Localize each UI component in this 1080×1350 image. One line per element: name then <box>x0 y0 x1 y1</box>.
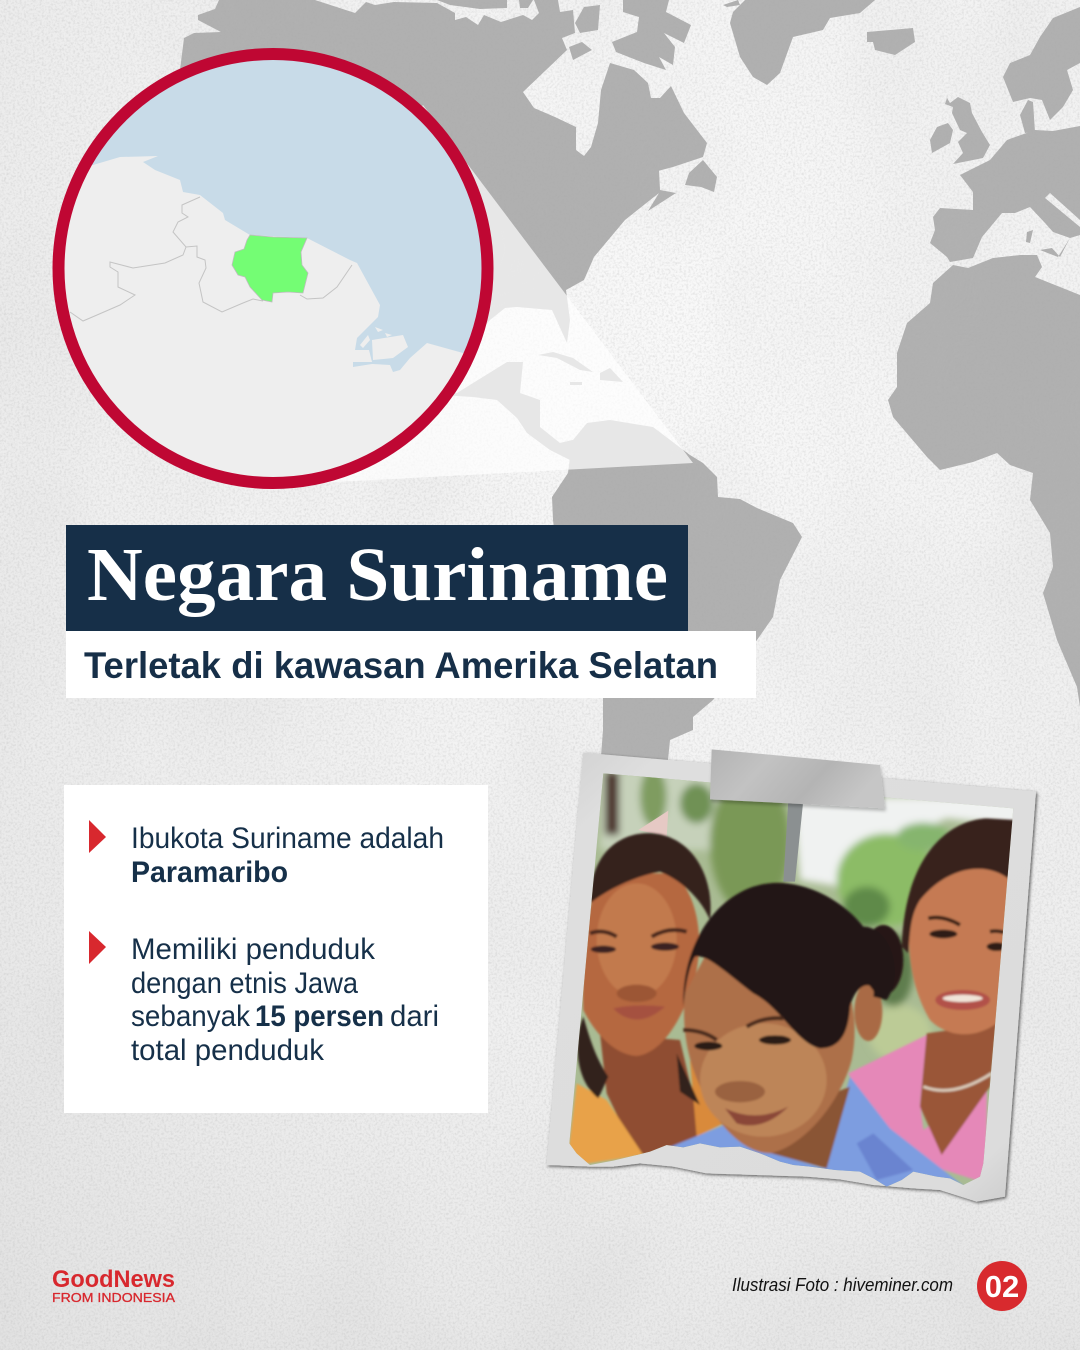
page number <box>977 1261 1027 1311</box>
country borders <box>70 197 352 321</box>
footer logo <box>52 1266 176 1305</box>
subtitle bar: Terletak di kawasan Amerika Selatan <box>84 645 718 686</box>
bullet one <box>89 820 106 853</box>
land in circle <box>64 156 464 477</box>
left girl <box>600 1033 703 1157</box>
South America <box>552 420 802 770</box>
circle ring <box>58 54 488 483</box>
delta islands <box>360 327 408 360</box>
tape <box>710 749 885 808</box>
Iceland <box>867 28 915 55</box>
United Kingdom and Ireland <box>930 97 990 164</box>
fact: population: dari <box>390 1000 439 1033</box>
Central America <box>440 362 573 460</box>
fact: population: Memiliki penduduk <box>131 933 376 966</box>
zoom cone from map to circle <box>273 105 693 483</box>
Newfoundland <box>685 160 717 192</box>
centre girl <box>669 1076 964 1186</box>
sign pole <box>783 800 803 882</box>
photo of three girls <box>569 774 1014 1186</box>
flag <box>638 811 668 837</box>
footer logo: GoodNews <box>52 1266 175 1293</box>
page number: 02 <box>985 1269 1019 1304</box>
subtitle bar <box>66 631 756 698</box>
fact: capital <box>131 822 444 889</box>
Africa <box>888 255 1080 707</box>
Arctic islands <box>437 0 691 70</box>
footer logo: FROM INDONESIA <box>52 1291 176 1305</box>
fact: population: sebanyak <box>131 1000 251 1033</box>
photo credit: Ilustrasi Foto : hiveminer.com <box>732 1275 953 1295</box>
Adriatic sea gap <box>1045 193 1080 227</box>
fact: capital: Ibukota Suriname adalah <box>131 822 444 855</box>
Scandinavia <box>1003 7 1080 133</box>
fact: population: total penduduk <box>131 1034 325 1067</box>
right girl <box>848 1035 987 1183</box>
world map <box>180 0 1080 770</box>
bullet two <box>89 931 106 964</box>
fact: capital: Paramaribo <box>131 856 288 889</box>
locator circle <box>40 54 520 500</box>
Caribbean islands <box>538 352 623 385</box>
North America <box>180 0 707 380</box>
Greenland <box>723 0 875 85</box>
title bar: Negara Suriname <box>87 533 668 617</box>
polaroid frame <box>547 753 1036 1202</box>
fact: population <box>131 933 439 1067</box>
fact: population: dengan etnis Jawa <box>131 967 358 1000</box>
Europe <box>930 126 1080 262</box>
Suriname highlighted <box>232 235 308 302</box>
fact: population: 15 persen <box>255 1000 384 1033</box>
panel: facts <box>64 785 488 1113</box>
polaroid photo <box>547 749 1036 1202</box>
